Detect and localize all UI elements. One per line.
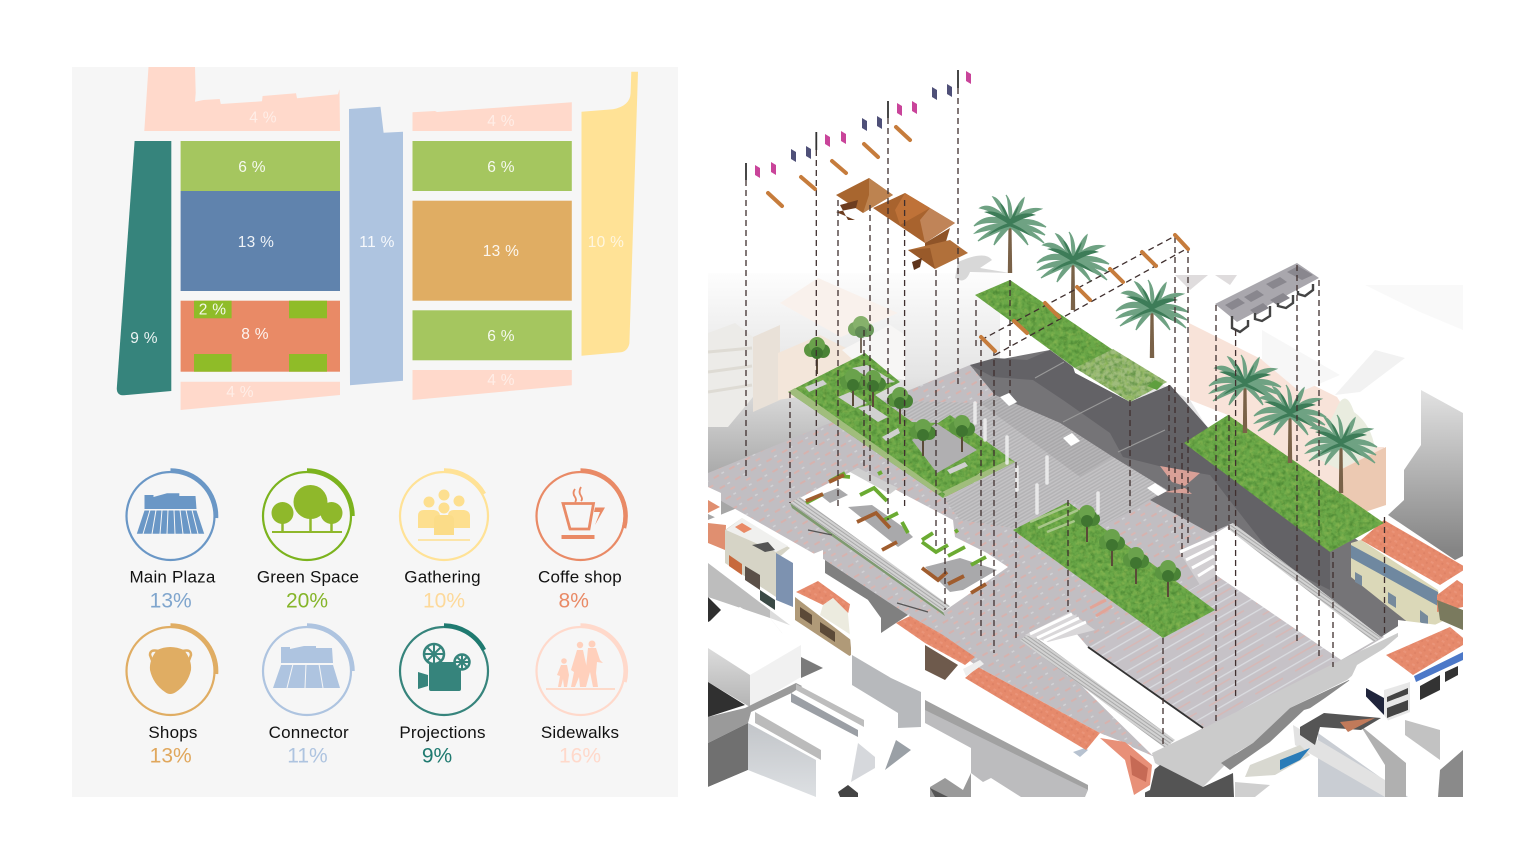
legend: projections: Projections bbox=[399, 723, 486, 742]
area: gathering 10%: 10 % bbox=[588, 234, 624, 251]
area: top-left sidewalk 4% bbox=[144, 67, 340, 131]
hanging dashed guide lines bbox=[746, 88, 1384, 745]
area: coffee shop 8% with green 2% patches: 8 % bbox=[241, 326, 269, 343]
background buildings left bbox=[708, 278, 905, 427]
steps bbox=[1025, 533, 1216, 642]
area: bottom-left sidewalk 4% bbox=[181, 382, 340, 410]
area: projections 9%: 9 % bbox=[130, 330, 158, 347]
fountains bbox=[975, 403, 1098, 513]
white plaza void and stripes bbox=[1020, 523, 1381, 755]
white mass lower right bbox=[1234, 680, 1463, 797]
area: green 6% top-left: 6 % bbox=[238, 159, 266, 176]
solar canopy bbox=[1215, 263, 1319, 332]
flag poles bbox=[746, 70, 958, 180]
panel: programme diagram and legend bbox=[72, 67, 678, 797]
area: bottom-right sidewalk 4%: 4 % bbox=[487, 372, 515, 389]
backdrop: faded ground bbox=[708, 298, 1000, 520]
grey fountain court and striped band bbox=[868, 393, 1167, 528]
area: green 6% right top: 6 % bbox=[487, 159, 515, 176]
legend: connector: Connector bbox=[269, 723, 349, 742]
green panel: long upper strip bbox=[975, 280, 1167, 402]
area: coffee shop 8% with green 2% patches bbox=[181, 301, 340, 372]
bottom road bbox=[1152, 628, 1408, 787]
legend: coffee shop bbox=[536, 470, 626, 612]
area: coffee shop 8% with green 2% patches: 2 % bbox=[199, 302, 226, 318]
site area diagram bbox=[117, 67, 638, 410]
area: connector 11% bbox=[349, 107, 403, 385]
legend: connector: 11% bbox=[287, 744, 328, 768]
area: projections 9% bbox=[117, 141, 171, 395]
legend: main plaza bbox=[126, 470, 216, 612]
legend: sidewalks: 16% bbox=[559, 744, 601, 768]
lower-left buildings bbox=[708, 560, 908, 787]
legend: green space: Green Space bbox=[257, 568, 359, 586]
shops panel bbox=[790, 468, 1008, 616]
road shadows bbox=[1221, 680, 1358, 770]
green panel: big right strip bbox=[1184, 415, 1384, 552]
road shadow band bbox=[970, 350, 1420, 637]
trees on the left garden bbox=[804, 316, 975, 456]
area: green 6% right top bbox=[412, 141, 572, 191]
legend: shops bbox=[126, 625, 216, 768]
legend: main plaza: Main Plaza bbox=[129, 568, 216, 586]
white mass lower left bbox=[708, 655, 1088, 797]
colourful facades bbox=[708, 487, 881, 657]
area: green 6% right bottom bbox=[412, 310, 572, 360]
legend: coffee shop: 8% bbox=[559, 590, 589, 612]
legend: connector bbox=[263, 626, 352, 768]
legend: projections: 9% bbox=[422, 744, 452, 768]
panel: axonometric exploded view of the plaza bbox=[708, 70, 1468, 797]
pink patches in the shadow bbox=[1160, 466, 1200, 494]
area: top-right sidewalk 4%: 4 % bbox=[487, 113, 515, 130]
area: top-right sidewalk 4% bbox=[412, 102, 572, 131]
background buildings right bbox=[1130, 275, 1463, 560]
area: green 6% right bottom: 6 % bbox=[487, 328, 515, 345]
area: bottom-right sidewalk 4% bbox=[412, 370, 572, 400]
legend: shops: 13% bbox=[150, 744, 192, 768]
legend: projections bbox=[399, 626, 488, 768]
area: gathering 10% bbox=[582, 72, 638, 356]
corner building bbox=[1100, 735, 1155, 795]
legend: sidewalks: Sidewalks bbox=[541, 723, 619, 742]
area: top-left sidewalk 4%: 4 % bbox=[249, 110, 277, 126]
legend: green space: 20% bbox=[286, 590, 328, 612]
palm trees bbox=[974, 195, 1377, 493]
area: shops 13%: 13 % bbox=[483, 243, 519, 260]
legend: green space bbox=[257, 470, 359, 612]
legend: sidewalks bbox=[536, 626, 626, 768]
area: main plaza 13% bbox=[181, 191, 340, 291]
area: main plaza 13%: 13 % bbox=[238, 234, 274, 251]
legend: gathering bbox=[400, 470, 488, 612]
area: bottom-left sidewalk 4%: 4 % bbox=[226, 384, 254, 401]
legend: shops: Shops bbox=[148, 723, 198, 742]
green panel: central strip bbox=[1013, 502, 1215, 638]
green panel: left garden bbox=[788, 353, 1015, 498]
legend: gathering: 10% bbox=[423, 590, 465, 612]
pavement bbox=[708, 365, 1384, 757]
legend: gathering: Gathering bbox=[404, 568, 481, 586]
right buildings bbox=[1351, 520, 1463, 760]
floating benches bbox=[768, 127, 1188, 351]
area: connector 11%: 11 % bbox=[359, 234, 395, 251]
legend: coffee shop: Coffe shop bbox=[538, 568, 622, 586]
orange roofs left bbox=[896, 616, 1100, 750]
area: green 6% top-left bbox=[181, 141, 340, 191]
trees on the central strip bbox=[1074, 505, 1181, 597]
rust coloured roofs bbox=[836, 178, 968, 270]
legend: main plaza: 13% bbox=[150, 590, 192, 612]
area: shops 13% bbox=[412, 201, 572, 301]
banners bbox=[755, 71, 971, 178]
palm shadow bbox=[955, 255, 1010, 280]
